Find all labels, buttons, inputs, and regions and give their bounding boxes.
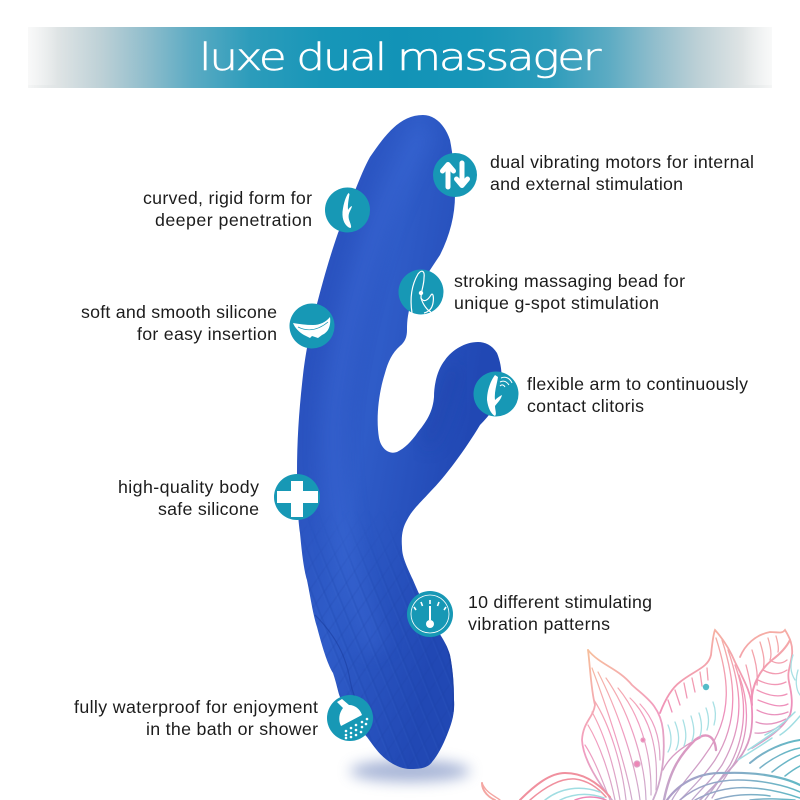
callout: waterproof: in the bath or shower	[146, 719, 318, 739]
callout: flexible arm: flexible arm to continuously	[527, 374, 748, 394]
icon: bead outline	[398, 270, 444, 314]
lotus flower decoration	[482, 630, 800, 800]
callout: massaging bead: stroking massaging bead for	[454, 271, 685, 291]
petals bottom right blue	[667, 712, 800, 800]
body silhouette	[297, 115, 502, 769]
petal left	[582, 650, 664, 800]
product: dual massager	[290, 115, 502, 782]
icon: arm with waves	[474, 372, 518, 416]
icon: curved silhouette	[325, 188, 370, 232]
callout: flexible arm: contact clitoris	[527, 396, 644, 416]
callout: dual motors	[433, 152, 754, 197]
callout: vibration patterns: vibration patterns	[468, 614, 610, 634]
petal right	[740, 630, 800, 748]
callout: soft silicone: soft and smooth silicone	[81, 302, 277, 322]
title: luxe dual massager	[199, 36, 602, 79]
callout: dual motors: dual vibrating motors for internal	[490, 152, 754, 172]
icon: plus	[274, 474, 320, 520]
icon: gauge	[407, 591, 453, 637]
callout: curved form: curved, rigid form for	[143, 188, 312, 208]
floor shadow	[350, 760, 470, 782]
callout: waterproof: fully waterproof for enjoyment	[74, 697, 318, 717]
callout: massaging bead: unique g-spot stimulation	[454, 293, 659, 313]
callout: vibration patterns: 10 different stimulating	[468, 592, 652, 612]
petal middle	[660, 630, 752, 800]
callout: soft silicone	[81, 302, 334, 348]
callout: flexible arm	[474, 372, 748, 416]
callout: dual motors: and external stimulation	[490, 174, 683, 194]
callout: body safe silicone: high-quality body	[118, 477, 259, 497]
icon: up and down arrows	[433, 153, 477, 197]
callout: massaging bead	[398, 270, 685, 314]
callout: body safe silicone	[118, 474, 320, 520]
callout: soft silicone: for easy insertion	[137, 324, 277, 344]
callout: body safe silicone: safe silicone	[158, 499, 259, 519]
callout: waterproof	[74, 695, 373, 741]
callout: curved form	[143, 188, 370, 232]
petal bottom left	[482, 773, 610, 800]
icon: shower head	[327, 695, 373, 741]
header banner	[28, 27, 772, 88]
icon: feather	[290, 304, 334, 348]
callout: curved form: deeper penetration	[155, 210, 312, 230]
soft highlight	[333, 130, 425, 650]
callout: vibration patterns	[407, 591, 652, 637]
textured lower lattice	[306, 556, 453, 764]
handle seams	[314, 614, 355, 696]
dark arm shading	[424, 399, 434, 424]
